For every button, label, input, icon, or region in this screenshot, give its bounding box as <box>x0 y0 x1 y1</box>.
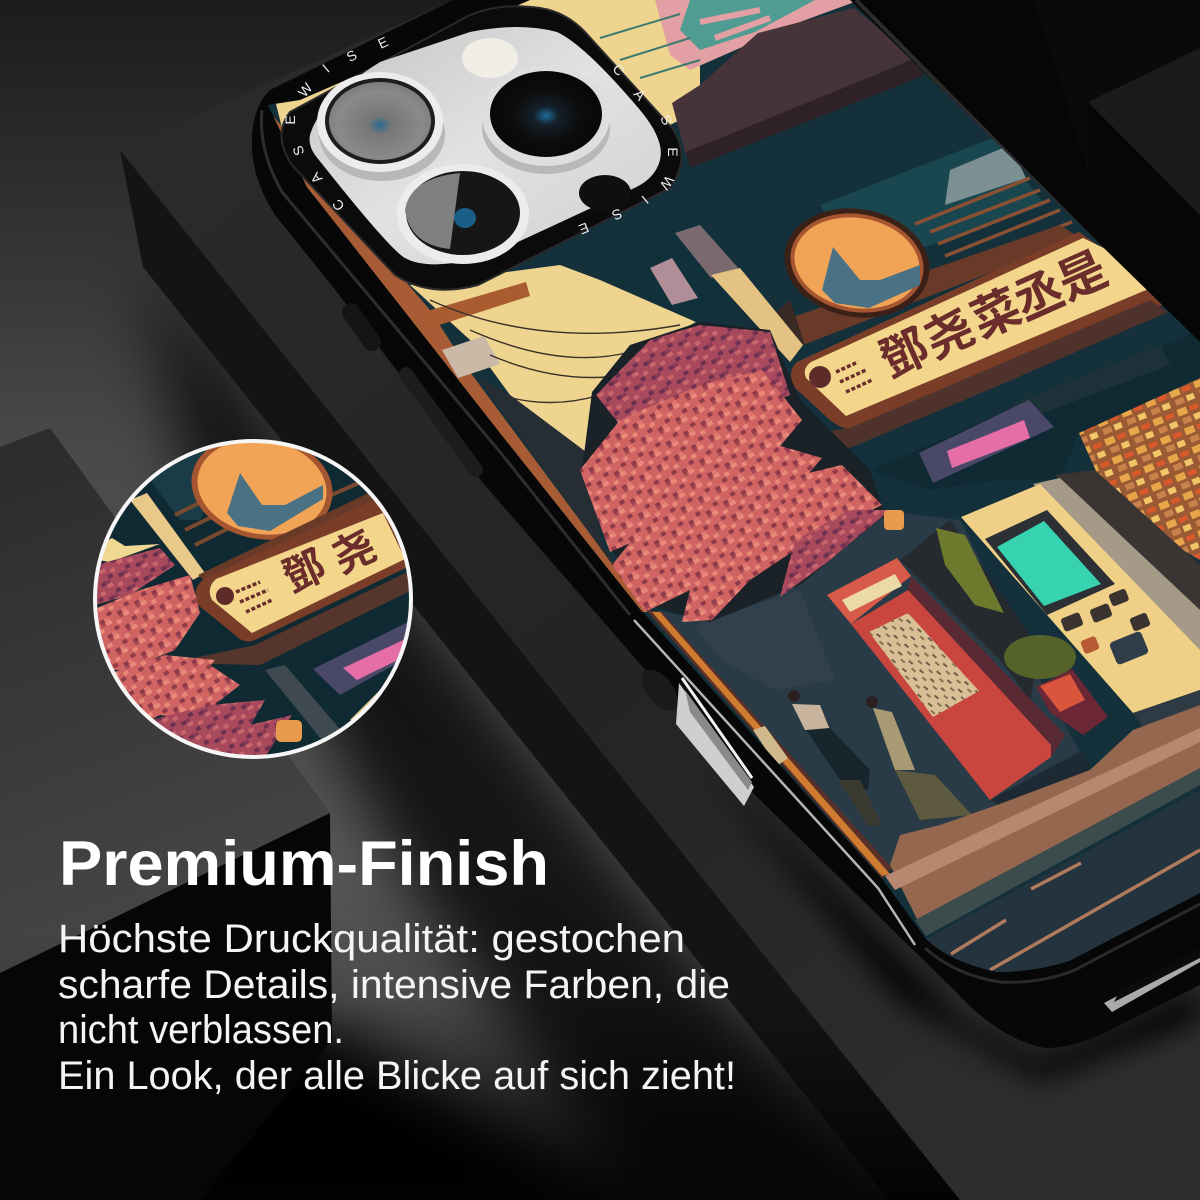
ring lettering CASEWISE: W <box>656 173 677 194</box>
upper right rim <box>856 0 1200 348</box>
magnifier: orange tag <box>276 720 302 742</box>
phone body <box>252 0 1200 1048</box>
ring lettering CASEWISE: A <box>307 169 325 187</box>
magnifier: slats <box>175 478 385 545</box>
artwork: brick edge <box>268 110 648 612</box>
artwork: shop label <box>753 726 788 766</box>
artwork: shop sign <box>791 232 1175 429</box>
description text: Höchste Druckqualität: gestochen <box>58 917 685 961</box>
magnifier: blossom tree <box>92 548 292 762</box>
description text: nicht verblassen. <box>58 1008 344 1052</box>
artwork: lit shop windows <box>1079 378 1200 560</box>
art edge highlight <box>634 620 915 945</box>
magnifier circle <box>90 423 420 762</box>
artwork: shop stripes bay <box>695 590 835 690</box>
artwork: road markings <box>951 850 1200 970</box>
artwork: corrugated roof <box>672 8 915 155</box>
artwork: orange shop edge <box>646 610 892 878</box>
artwork: pedestrians <box>788 690 972 826</box>
background: upper right dark area <box>850 0 1200 345</box>
lens: right <box>482 66 610 174</box>
magnifier: window <box>150 445 240 520</box>
ring lettering CASEWISE: A <box>631 86 649 104</box>
artwork: green plant <box>936 528 1004 613</box>
artwork: sky wires <box>600 14 700 78</box>
magnifier: vending corner <box>350 690 412 740</box>
sign characters: 鄧 <box>872 321 937 389</box>
artwork: upper sky <box>250 0 700 200</box>
lens: bottom <box>397 164 529 264</box>
artwork: lower sky <box>410 265 696 455</box>
magnifier: shop sign <box>195 499 412 642</box>
sign characters: 尧 <box>917 301 982 369</box>
ring lettering CASEWISE: E <box>577 219 591 238</box>
artwork: awning <box>692 320 696 322</box>
magnifier: shop pillar <box>265 665 345 750</box>
artwork: roof eave <box>686 60 925 168</box>
ring lettering CASEWISE: S <box>657 112 676 128</box>
title: Premium-Finish <box>59 829 549 899</box>
artwork: wooden beam <box>430 282 530 325</box>
artwork: sky pink and teal <box>655 0 860 70</box>
artwork: brown strip under sign <box>831 300 1168 448</box>
silver side button <box>676 678 754 806</box>
magnifier: brown strip <box>170 570 412 665</box>
bottom port <box>1104 948 1200 1012</box>
side socket <box>635 663 685 717</box>
artwork: red phone booth <box>827 558 1092 812</box>
gloss rim along case <box>261 110 630 615</box>
lens: left <box>317 72 445 181</box>
lidar sensor <box>579 175 631 211</box>
magnifier: sign characters: 尧 <box>325 522 383 582</box>
description text <box>58 917 736 1098</box>
background: block cast shadow <box>143 267 889 1200</box>
camera plate <box>310 27 661 264</box>
ring lettering CASEWISE: C <box>329 196 348 214</box>
ring lettering CASEWISE: W <box>295 79 316 100</box>
artwork: neon sign <box>919 400 1054 483</box>
ring lettering CASEWISE: S <box>289 144 307 158</box>
ring lettering CASEWISE: I <box>319 61 332 76</box>
ring lettering CASEWISE: I <box>639 192 652 207</box>
artwork: left side houses <box>478 378 614 565</box>
ring lettering CASEWISE: S <box>609 205 625 224</box>
magnifier: sign characters <box>275 522 383 602</box>
description text: scharfe Details, intensive Farben, die <box>58 963 730 1007</box>
phone shadow <box>700 760 1200 1080</box>
artwork: flower pot <box>1004 635 1108 735</box>
ring lettering CASEWISE: C <box>609 61 628 79</box>
artwork: sidewalk <box>890 705 1200 925</box>
artwork: upper window <box>820 138 1045 248</box>
artwork: road <box>926 790 1200 975</box>
magnifier: neon sign <box>313 620 412 695</box>
rim shine along corner <box>925 904 1200 982</box>
magnifier ring <box>95 441 411 757</box>
background: soft dark bottom <box>0 1000 960 1200</box>
background: soft step shadow <box>0 1000 640 1200</box>
ring lettering CASEWISE: E <box>375 33 391 52</box>
artwork: balcony slats <box>915 178 1072 268</box>
volume button <box>406 374 476 470</box>
artwork: vending machine <box>961 478 1200 730</box>
switch port <box>351 312 372 342</box>
small sign lettering <box>836 362 872 392</box>
ring lettering CASEWISE: E <box>282 115 298 125</box>
artwork: orange tag <box>884 510 904 530</box>
camera island <box>281 6 682 290</box>
printed artwork <box>268 0 1200 972</box>
ring lettering CASEWISE <box>282 33 681 238</box>
ring lettering CASEWISE: S <box>343 46 360 65</box>
background: lower left step face <box>0 813 332 1200</box>
background: upper right block edge <box>1033 0 1200 170</box>
artwork: darker bay <box>900 520 1040 700</box>
artwork: sun emblem <box>784 208 930 318</box>
artwork: sign post <box>675 225 740 278</box>
magnifier: sky wedge <box>98 538 160 562</box>
artwork: utility wires <box>430 300 680 402</box>
camera ring <box>281 6 682 290</box>
artwork: pink stripes <box>700 10 770 38</box>
sign characters <box>877 248 1110 380</box>
sign characters: 菜 <box>964 281 1029 349</box>
magnifier: brown rail <box>198 490 384 585</box>
magnifier: sign characters: 鄧 <box>275 542 333 602</box>
artwork: inner shop column <box>1055 470 1200 610</box>
artwork: dark shop front <box>871 338 1199 476</box>
magnifier: post <box>130 493 205 580</box>
description text: Ein Look, der alle Blicke auf sich zieht! <box>58 1054 736 1098</box>
artwork: lower building <box>658 510 1090 872</box>
artwork: blossom tree <box>580 322 890 622</box>
magnifier: sun emblem <box>183 423 341 551</box>
ring lettering CASEWISE: E <box>665 147 681 157</box>
phone case <box>252 0 1200 1048</box>
flash <box>462 38 518 78</box>
artwork: curb shade <box>915 768 1200 936</box>
artwork: pink sticker <box>650 258 698 305</box>
artwork: curb highlight <box>885 728 1200 890</box>
artwork: shop sticker <box>442 336 500 378</box>
magnifier: small lettering <box>236 582 272 612</box>
artwork: brown rail <box>796 225 1074 344</box>
sign characters: 是 <box>1050 243 1115 311</box>
background: block side face <box>120 150 960 1200</box>
sign characters: 丞 <box>1007 263 1072 331</box>
background: upper right block <box>1088 48 1200 215</box>
background: lower left step top <box>0 428 330 973</box>
